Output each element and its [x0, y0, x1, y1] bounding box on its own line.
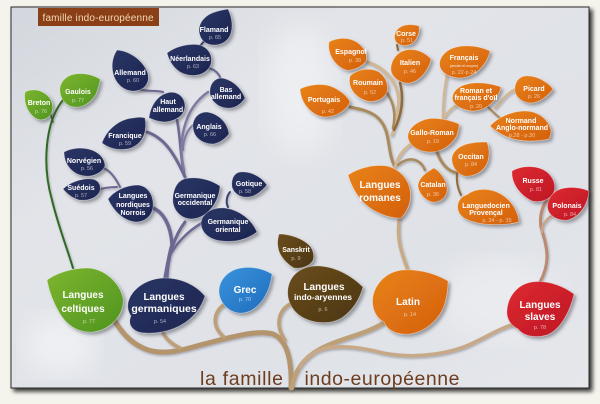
leaf: Roman et français d'oïl: Roman et: [460, 88, 493, 95]
leaf: Flamand: Flamand: [200, 27, 228, 34]
leaf group: indo-aryan family: [278, 234, 363, 323]
leaf: Corse: Corse: [396, 31, 416, 38]
leaf: Français: [440, 46, 490, 78]
leaf: Langues indo-aryennes: p. 6: [318, 307, 328, 313]
leaf: Grec: p. 70: [239, 297, 251, 303]
leaf: Suédois: p. 57: [75, 193, 87, 199]
leaf: Français: (ancien et moyen): [450, 64, 478, 68]
leaf: Latin: [373, 270, 448, 334]
leaf: Flamand: [199, 9, 232, 45]
leaf: Portugais: Portugais: [308, 97, 340, 104]
leaf: Grec: [219, 267, 272, 313]
leaf: Russe: [512, 167, 555, 202]
leaf: Langues romanes: Langues: [359, 180, 401, 191]
leaf: Bas allemand: Bas: [220, 87, 233, 94]
leaf: Germanique oriental: oriental: [215, 227, 241, 234]
leaf: Français: Français: [450, 55, 479, 62]
leaf: Langues germaniques: Langues: [143, 292, 185, 303]
leaf: Germanique oriental: Germanique: [208, 219, 249, 226]
leaf: Allemand: Allemand: [114, 70, 146, 77]
leaf: Corse: p. 51: [401, 38, 413, 44]
leaf: Breton: p. 76: [35, 109, 47, 115]
leaf: Breton: Breton: [28, 100, 50, 107]
leaf: Roman et français d'oïl: p. 20: [470, 104, 482, 110]
leaf: Bas allemand: allemand: [211, 94, 241, 101]
bottom title: la famille: [200, 368, 283, 390]
leaf: Russe: p. 81: [530, 187, 542, 193]
leaf: Occitan: [452, 142, 489, 176]
leaf: Néerlandais: Néerlandais: [170, 56, 210, 63]
leaf: Langues romanes: romanes: [359, 193, 401, 204]
leaf: Langues celtiques: p. 77: [83, 319, 95, 325]
leaf: Gallo-Roman: p. 19: [427, 139, 439, 145]
leaf: Germanique occidental: Germanique: [175, 193, 216, 200]
leaf: Normand Anglo-normand: p.28 - p.30: [509, 133, 535, 139]
leaf: Flamand: p. 65: [209, 35, 221, 41]
stems: celtic branch: [46, 100, 73, 268]
leaf: Norvégien: [64, 148, 105, 176]
leaf: Occitan: p. 84: [465, 162, 477, 168]
leaf: Langues nordiques Norrois: Langues: [119, 193, 147, 200]
leaf: Occitan: Occitan: [458, 154, 484, 161]
leaf: Gaulois: [60, 74, 100, 107]
leaf: Latin: Latin: [396, 297, 420, 308]
leaf: Suédois: Suédois: [67, 185, 95, 192]
leaf: Langues slaves: Langues: [519, 300, 561, 311]
leaf: Germanique occidental: [173, 178, 220, 219]
leaf: Catalan: [418, 168, 447, 202]
leaf: Langues indo-aryennes: Langues: [303, 282, 345, 293]
leaf: Polonais: [547, 187, 589, 220]
leaf: Sanskrit: [278, 234, 314, 268]
leaf: Gotique: [232, 172, 267, 197]
leaf: Languedocien Provençal: [458, 189, 519, 225]
leaf: Germanique occidental: occidental: [178, 200, 212, 207]
leaf: Sanskrit: Sanskrit: [282, 247, 310, 254]
leaf: Francique: Francique: [108, 133, 142, 140]
leaf: Francique: p. 59: [119, 141, 131, 147]
leaf: Roman et français d'oïl: français d'oïl: [455, 95, 498, 102]
leaf group: romance family: [300, 25, 553, 334]
leaf: Langues nordiques Norrois: Norrois: [121, 210, 146, 217]
leaf: Picard: p. 26: [528, 94, 540, 100]
leaf: Langues romanes: [348, 165, 410, 218]
leaf: Roman et français d'oïl: [452, 83, 501, 111]
leaf: Catalan: Catalan: [420, 182, 446, 189]
leaf: Normand Anglo-normand: [490, 111, 551, 141]
leaf: Anglais: [193, 112, 229, 144]
leaf: Italien: Italien: [400, 60, 420, 67]
leaf: Langues germaniques: [128, 278, 205, 333]
leaf group: slavic family: [507, 167, 589, 337]
leaf: Latin: p. 14: [404, 312, 416, 318]
leaf: Français: p. 22-p.24: [452, 70, 476, 76]
leaf: Roumain: p. 52: [364, 90, 376, 96]
leaf: Langues germaniques: p. 54: [154, 319, 166, 325]
leaf: Gaulois: p. 77: [72, 98, 84, 104]
leaf: Roumain: [349, 69, 388, 102]
leaf: Langues slaves: p. 78: [534, 325, 546, 331]
leaf: Langues nordiques Norrois: [108, 185, 153, 222]
leaf: Espagnol: p. 38: [349, 58, 361, 64]
leaf: Bas allemand: [210, 78, 245, 108]
header tab: famille indo-européenne: [42, 13, 154, 24]
leaf: Corse: [395, 25, 419, 46]
leaf group: celtic family: [25, 74, 123, 332]
leaf: Néerlandais: p. 63: [187, 64, 199, 70]
leaf: Langues celtiques: [47, 268, 123, 332]
leaf: Gallo-Roman: [408, 118, 459, 152]
leaf: Allemand: p. 60: [127, 78, 139, 84]
leaf: Gaulois: Gaulois: [65, 89, 91, 96]
leaf: Langues celtiques: celtiques: [61, 304, 105, 315]
leaf: Languedocien Provençal: Provençal: [469, 210, 503, 217]
leaf: Portugais: [300, 85, 350, 117]
leaf: Gallo-Roman: Gallo-Roman: [410, 130, 454, 137]
leaf: Picard: Picard: [523, 86, 545, 93]
leaf: Haut allemand: [149, 92, 185, 122]
leaf: Roumain: Roumain: [353, 80, 383, 87]
leaf: Normand Anglo-normand: Anglo-normand: [496, 125, 548, 132]
leaf: Grec: Grec: [234, 285, 257, 296]
leaf: Anglais: Anglais: [196, 124, 222, 131]
leaf: Polonais: p. 84: [564, 212, 576, 218]
leaf: Anglais: p. 66: [204, 132, 216, 138]
bottom title: [200, 368, 460, 390]
leaf: Norvégien: p. 56: [81, 166, 93, 172]
leaf: Espagnol: [329, 38, 367, 70]
leaf: Suédois: [63, 179, 100, 200]
header tab: [38, 8, 159, 26]
leaf: Italien: p. 46: [404, 69, 416, 75]
leaf: Langues nordiques Norrois: nordiques: [116, 202, 150, 209]
leaf: Francique: [102, 117, 146, 150]
bottom title: indo-européenne: [304, 368, 460, 390]
leaf: Germanique oriental: [201, 208, 257, 242]
leaf: Haut allemand: Haut: [160, 99, 176, 106]
main trunk and branches: [113, 200, 557, 388]
leaf: Néerlandais: [167, 44, 212, 76]
leaf: Langues germaniques: germaniques: [131, 303, 197, 315]
leaf: Espagnol: Espagnol: [335, 49, 367, 56]
leaf: Polonais: Polonais: [552, 203, 582, 210]
leaf: Allemand: [112, 50, 148, 91]
leaf: Haut allemand: allemand: [153, 107, 183, 114]
leaf: Langues slaves: slaves: [525, 312, 556, 323]
leaf: Portugais: p. 42: [322, 109, 334, 115]
leaf: Langues indo-aryennes: indo-aryennes: [294, 292, 352, 302]
leaf: Languedocien Provençal: Languedocien: [462, 203, 510, 210]
leaf: Italien: [391, 49, 431, 83]
stems: romance branch: [350, 45, 517, 195]
leaf: Sanskrit: p. 9: [291, 256, 301, 262]
leaf: Picard: [515, 76, 553, 103]
leaf: Breton: [25, 90, 53, 120]
leaf: Languedocien Provençal: p. 34 - p. 35: [482, 218, 512, 224]
stems: germanic branch: [97, 40, 230, 278]
leaf: Gotique: Gotique: [236, 181, 262, 188]
leaf: Norvégien: Norvégien: [67, 158, 101, 165]
leaf: Gotique: p. 58: [239, 189, 251, 195]
leaf group: germanic family: [63, 9, 267, 333]
leaf: Langues slaves: [507, 282, 574, 337]
leaf: Langues celtiques: Langues: [62, 290, 104, 301]
leaf: Russe: Russe: [522, 178, 544, 185]
leaf: Catalan: p. 36: [427, 192, 439, 198]
leaf: Normand Anglo-normand: Normand: [506, 118, 536, 125]
leaf: Langues indo-aryennes: [288, 266, 363, 323]
